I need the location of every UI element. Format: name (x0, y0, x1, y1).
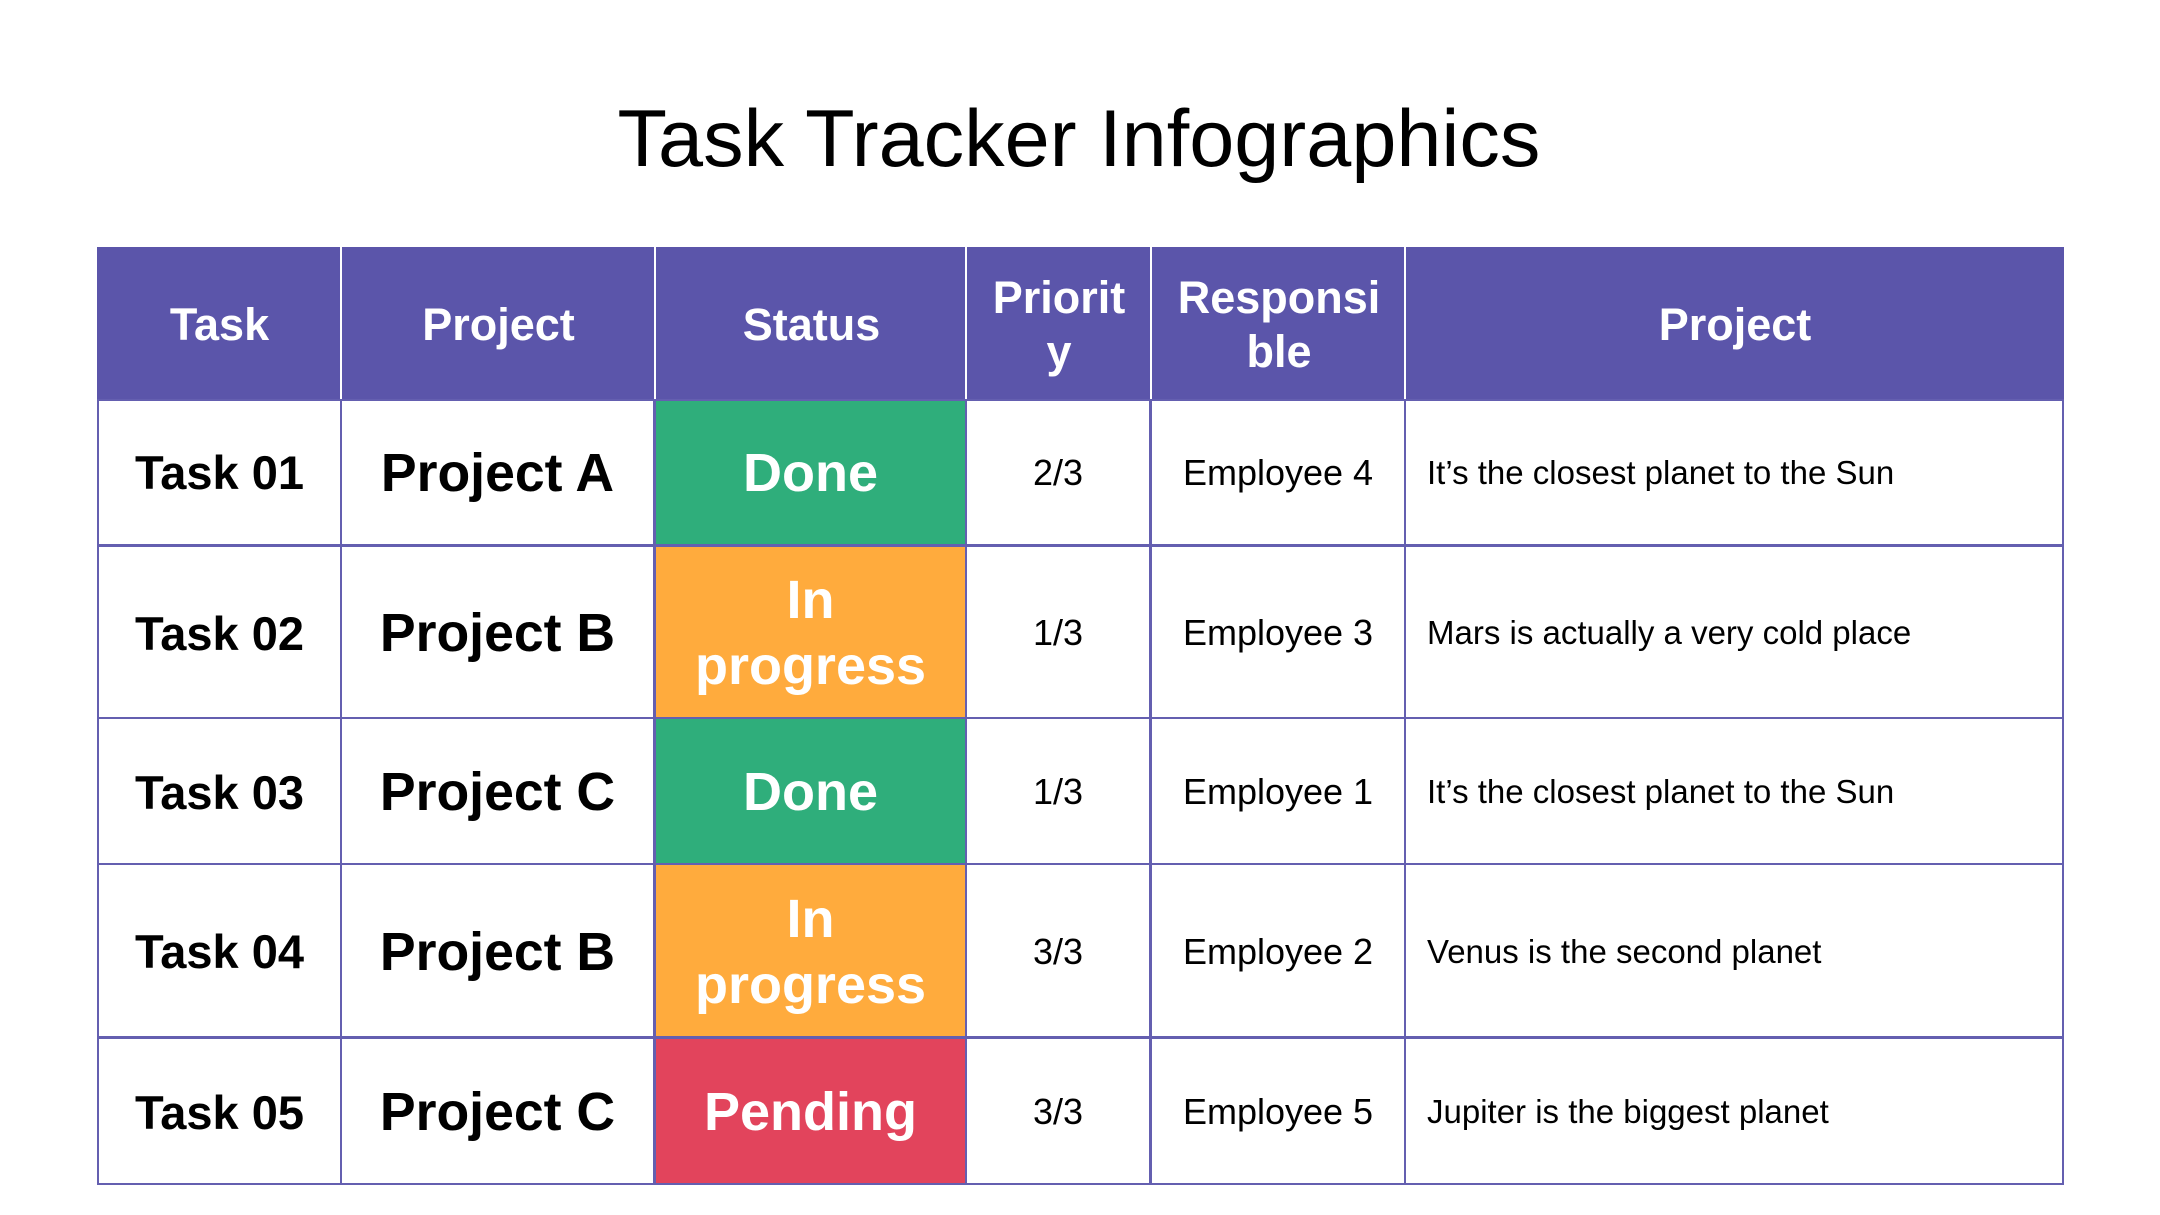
row 2 status: in progress: progress (695, 636, 926, 696)
row 1 task (97, 399, 342, 546)
row 2 priority (965, 545, 1151, 719)
row 4 responsible: Employee 2 (1183, 930, 1373, 972)
row 2 task (97, 545, 342, 719)
header: Project: Project (422, 298, 575, 350)
row 4 priority: 3/3 (1033, 930, 1083, 972)
row 5 priority: 3/3 (1033, 1091, 1083, 1132)
header: Priority (965, 247, 1151, 400)
row 5 status: pending: Pending (704, 1082, 917, 1142)
row 5 responsible (1150, 1037, 1406, 1185)
row 2 description (1404, 545, 2064, 719)
row 4 status: in progress: progress (695, 954, 926, 1014)
row 3 priority (965, 717, 1151, 865)
row 3 status: done (654, 717, 967, 865)
row 5 responsible: Employee 5 (1183, 1091, 1373, 1132)
row 2 project: Project B (380, 603, 615, 663)
header: Responsible (1150, 247, 1406, 400)
row 1 project (340, 399, 655, 546)
header: Priority: Priorit (993, 272, 1125, 322)
row 3 description (1404, 717, 2064, 865)
header: Project description: Project (1659, 298, 1811, 350)
table: task tracker (97, 247, 2064, 1185)
row 4 responsible (1150, 863, 1406, 1038)
row 1 responsible: Employee 4 (1183, 452, 1373, 492)
row 2 priority: 1/3 (1033, 612, 1083, 653)
row 3 responsible (1150, 717, 1406, 865)
row 5 priority (965, 1037, 1151, 1185)
row 2 description: Mars is actually a very cold place (1427, 614, 1911, 651)
row 3 description: It’s the closest planet to the Sun (1427, 773, 1894, 810)
row 1 description: It’s the closest planet to the Sun (1427, 454, 1894, 490)
header: Responsible: Responsi (1178, 272, 1380, 322)
row 3 task: Task 03 (135, 766, 304, 818)
row 3 project (340, 717, 655, 865)
row 4 priority (965, 863, 1151, 1038)
row 5 task (97, 1037, 342, 1185)
header: Status (654, 247, 967, 400)
title: Task Tracker Infographics (618, 94, 1540, 184)
header: Status: Status (743, 298, 880, 350)
row 5 description (1404, 1037, 2064, 1185)
row 4 status: in progress: In (786, 888, 834, 948)
row 2 task: Task 02 (135, 606, 304, 660)
header: Task: Task (170, 298, 269, 350)
header: Responsible: ble (1246, 326, 1312, 376)
row 2 status: in progress: In (786, 570, 834, 630)
row 1 project: Project A (381, 442, 614, 502)
row 5 project (340, 1037, 655, 1185)
header: Priority: y (1046, 326, 1072, 376)
row 2 responsible (1150, 545, 1406, 719)
row 5 description: Jupiter is the biggest planet (1427, 1093, 1829, 1130)
row 1 task: Task 01 (135, 446, 304, 499)
row 4 status: in progress (654, 863, 967, 1038)
row 2 status: in progress (654, 545, 967, 719)
row 4 project: Project B (380, 922, 615, 982)
row 4 task: Task 04 (135, 925, 304, 978)
row 1 priority (965, 399, 1151, 546)
row 3 status: done: Done (743, 762, 878, 822)
row 3 priority: 1/3 (1033, 771, 1083, 812)
row 4 description (1404, 863, 2064, 1038)
row 2 project (340, 545, 655, 719)
row 1 priority: 2/3 (1033, 452, 1083, 492)
row 3 task (97, 717, 342, 865)
header: Project description (1404, 247, 2064, 400)
row 1 status: done: Done (743, 442, 878, 502)
row 5 task: Task 05 (135, 1086, 304, 1138)
row 5 status: pending (654, 1037, 967, 1185)
row 3 project: Project C (380, 762, 615, 822)
row 1 status: done (654, 399, 967, 546)
row 4 description: Venus is the second planet (1427, 932, 1821, 970)
row 5 project: Project C (380, 1082, 615, 1142)
header: Project (340, 247, 655, 400)
row 2 responsible: Employee 3 (1183, 612, 1373, 653)
row 1 responsible (1150, 399, 1406, 546)
row 1 description (1404, 399, 2064, 546)
row 3 responsible: Employee 1 (1183, 771, 1373, 812)
header: Task (97, 247, 342, 400)
row 4 project (340, 863, 655, 1038)
row 4 task (97, 863, 342, 1038)
